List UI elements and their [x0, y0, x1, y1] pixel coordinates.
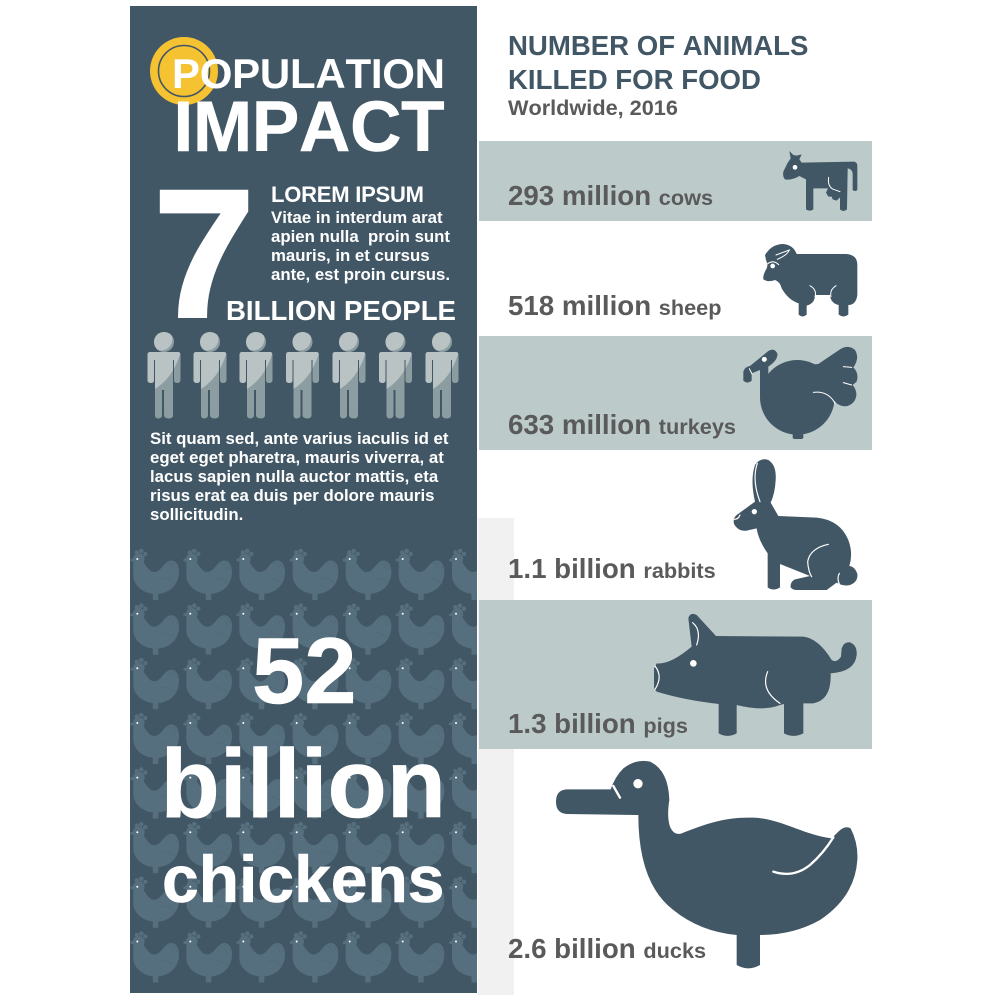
- icon: turkey: [743, 347, 857, 439]
- label: rabbits: 1.1 billion rabbits: [508, 553, 716, 584]
- big stat: 52 billion chickens: billion: [160, 729, 446, 838]
- icon: yellow target: [150, 37, 218, 105]
- label: turkeys: 633 million turkeys: [508, 409, 736, 440]
- title: POPULATION: [172, 50, 445, 97]
- band: turkeys: [479, 336, 872, 450]
- icon: rabbit: [734, 459, 857, 590]
- panel: population impact: [130, 6, 498, 993]
- heading: number of animals: KILLED FOR FOOD: [508, 64, 761, 95]
- text block: sit quam: sollicitudin.: [150, 505, 243, 524]
- band: pigs: [479, 600, 872, 749]
- people icons: [148, 332, 458, 418]
- heading: billion people: BILLION PEOPLE: [226, 295, 456, 326]
- label: sheep: 518 million sheep: [508, 290, 721, 321]
- title: IMPACT: [174, 88, 444, 167]
- text block: lorem ipsum: LOREM IPSUM: [271, 182, 424, 207]
- text block: sit quam: risus erat ea duis per dolore mauris: [150, 486, 434, 505]
- big stat: 52 billion chickens: 52: [252, 618, 357, 723]
- heading: number of animals: Worldwide, 2016: [508, 95, 678, 120]
- text block: lorem ipsum: ante, est proin cursus.: [271, 265, 450, 284]
- band: cows: [479, 141, 872, 221]
- icon: duck: [556, 761, 857, 968]
- big number 7: 7: [154, 152, 255, 356]
- label: pigs: 1.3 billion pigs: [508, 708, 688, 739]
- grey backing strip: [478, 518, 514, 995]
- text block: lorem ipsum: mauris, in et cursus: [271, 246, 430, 265]
- text block: lorem ipsum: Vitae in interdum arat: [271, 208, 443, 227]
- big stat: 52 billion chickens: [160, 618, 446, 916]
- text block: lorem ipsum: [271, 182, 450, 284]
- text block: sit quam: [150, 429, 449, 524]
- heading: number of animals: [508, 30, 808, 120]
- icon: sheep: [763, 244, 857, 316]
- label: ducks: 2.6 billion ducks: [508, 933, 706, 964]
- big stat: 52 billion chickens: chickens: [162, 842, 444, 916]
- label: cows: 293 million cows: [508, 180, 713, 211]
- text block: lorem ipsum: apien nulla proin sunt: [271, 227, 450, 246]
- chicken pattern background: [130, 549, 498, 982]
- heading: number of animals: NUMBER OF ANIMALS: [508, 30, 808, 61]
- icon: cow: [783, 151, 857, 211]
- text block: sit quam: Sit quam sed, ante varius iaculis id et: [150, 429, 449, 448]
- title: [172, 50, 445, 167]
- icon: pig: [654, 614, 857, 736]
- text block: sit quam: lacus sapien nulla auctor mattis, eta: [150, 467, 439, 486]
- text block: sit quam: eget eget pharetra, mauris viverra, at: [150, 448, 444, 467]
